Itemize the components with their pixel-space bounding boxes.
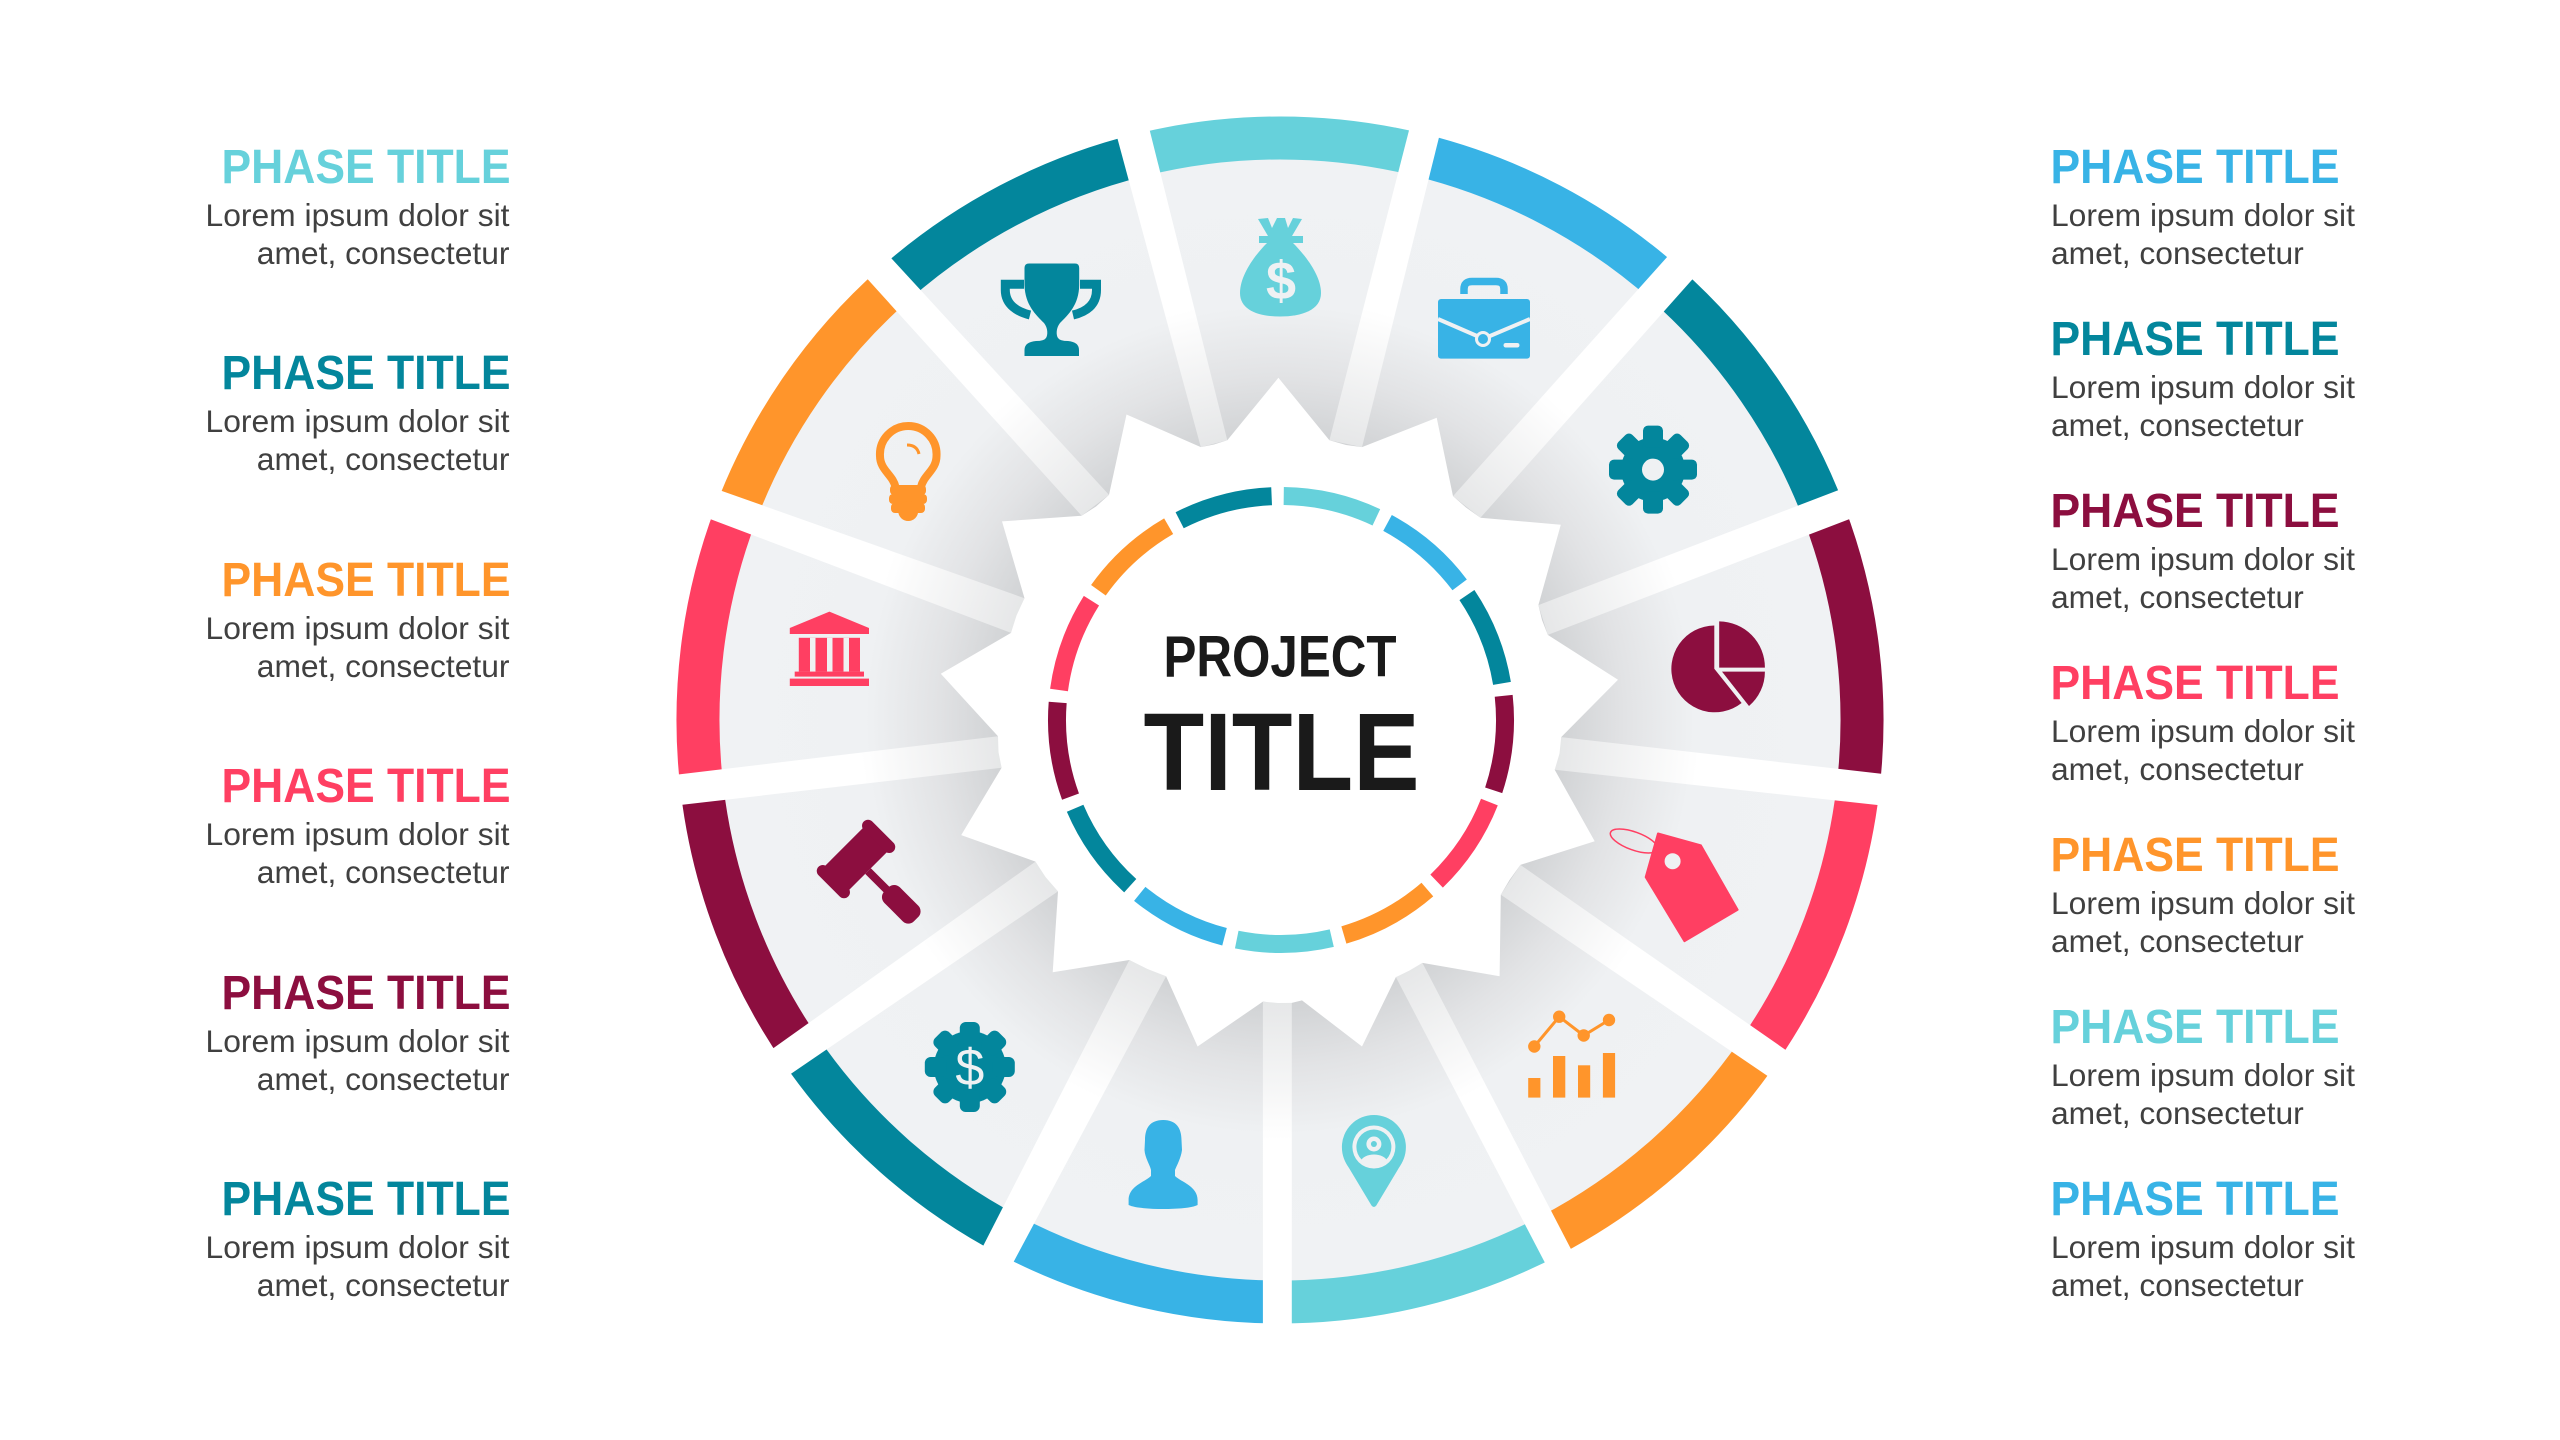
left column: phase 6: amet, consectetur <box>257 1267 510 1303</box>
left column: phase 4: PHASE TITLE <box>222 760 510 813</box>
inner segmented ring <box>965 404 1597 1036</box>
white star hub <box>941 378 1618 1046</box>
icon: light bulb <box>880 426 937 521</box>
left column: phase 4: amet, consectetur <box>257 854 510 890</box>
right column: phase 7: Lorem ipsum dolor sit <box>2051 197 2355 233</box>
left column: phase 5 <box>206 967 510 1097</box>
left column: phase 3: Lorem ipsum dolor sit <box>206 610 510 646</box>
right column: phase 12 <box>2050 1001 2355 1131</box>
right column: phase 11: PHASE TITLE <box>2050 829 2340 882</box>
right column: phase 9: amet, consectetur <box>2051 579 2304 615</box>
left column: phase 6 <box>206 1173 510 1303</box>
right column: phase 8: PHASE TITLE <box>2050 313 2340 366</box>
center title <box>1144 625 1420 814</box>
icon: trophy <box>1005 264 1096 356</box>
icon: location pin <box>1342 1115 1406 1207</box>
right column: phase 10: PHASE TITLE <box>2050 657 2340 710</box>
right column: phase 12: amet, consectetur <box>2051 1095 2304 1131</box>
left column: phase 5: Lorem ipsum dolor sit <box>206 1023 510 1059</box>
right column: phase 13: PHASE TITLE <box>2050 1173 2340 1226</box>
left column: phase 1: Lorem ipsum dolor sit <box>206 197 510 233</box>
left column: phase 3: PHASE TITLE <box>222 554 510 607</box>
right column: phase 9 <box>2050 485 2355 615</box>
right column: phase 12: Lorem ipsum dolor sit <box>2051 1057 2355 1093</box>
right column: phase 13 <box>2050 1173 2355 1303</box>
left column: phase 2: Lorem ipsum dolor sit <box>206 403 510 439</box>
left column: phase 2 <box>206 347 510 477</box>
right column: phase 10 <box>2050 657 2355 787</box>
outer coloured ring <box>698 138 1862 1302</box>
wheel: segmented phase diagram <box>668 119 1891 1335</box>
left column: phase 5: PHASE TITLE <box>222 967 510 1020</box>
left column: phase 6: Lorem ipsum dolor sit <box>206 1229 510 1265</box>
icon: bank <box>790 612 869 686</box>
right column: phase 13: amet, consectetur <box>2051 1267 2304 1303</box>
right column: phase 13: Lorem ipsum dolor sit <box>2051 1229 2355 1265</box>
right column: phase 7: PHASE TITLE <box>2050 141 2340 194</box>
right column: phase 11 <box>2050 829 2355 959</box>
left column: phase 1: PHASE TITLE <box>222 141 510 194</box>
icon: money bag <box>1240 218 1321 316</box>
icon: money bag: $ <box>1266 251 1296 311</box>
right column: phase 9: PHASE TITLE <box>2050 485 2340 538</box>
left column: phase 5: amet, consectetur <box>257 1061 510 1097</box>
right column: phase 10: Lorem ipsum dolor sit <box>2051 713 2355 749</box>
icon: growth chart <box>1528 1010 1615 1098</box>
icon: briefcase <box>1438 282 1530 359</box>
left column: phase 6: PHASE TITLE <box>222 1173 510 1226</box>
left column: phase 3 <box>206 554 510 684</box>
left column: phase 1 <box>206 141 510 271</box>
icon: person <box>1129 1120 1198 1209</box>
icon: dollar gear <box>925 1022 1015 1112</box>
icon: gavel <box>814 817 943 946</box>
grey wheel disk <box>705 145 1855 1295</box>
right column: phase 8: amet, consectetur <box>2051 407 2304 443</box>
left column: phase 2: amet, consectetur <box>257 441 510 477</box>
center title: TITLE <box>1144 691 1420 814</box>
left column: phase 1: amet, consectetur <box>257 235 510 271</box>
right column: phase 11: Lorem ipsum dolor sit <box>2051 885 2355 921</box>
separator strips between segments <box>668 119 1891 1335</box>
icon: pie chart <box>1671 621 1765 712</box>
right column: phase 8: Lorem ipsum dolor sit <box>2051 369 2355 405</box>
left column: phase 4: Lorem ipsum dolor sit <box>206 816 510 852</box>
icon: price tag <box>1607 824 1738 941</box>
right column: phase 7 <box>2050 141 2355 271</box>
right column: phase 8 <box>2050 313 2355 443</box>
left column: phase 3: amet, consectetur <box>257 648 510 684</box>
icon: dollar gear: $ <box>955 1039 984 1097</box>
right column: phase 11: amet, consectetur <box>2051 923 2304 959</box>
left column: phase 4 <box>206 760 510 890</box>
right column: phase 7: amet, consectetur <box>2051 235 2304 271</box>
right column: phase 12: PHASE TITLE <box>2050 1001 2340 1054</box>
right column: phase 9: Lorem ipsum dolor sit <box>2051 541 2355 577</box>
right column: phase 10: amet, consectetur <box>2051 751 2304 787</box>
left column: phase 2: PHASE TITLE <box>222 347 510 400</box>
center title: PROJECT <box>1164 625 1396 690</box>
icon: gear <box>1609 426 1697 514</box>
